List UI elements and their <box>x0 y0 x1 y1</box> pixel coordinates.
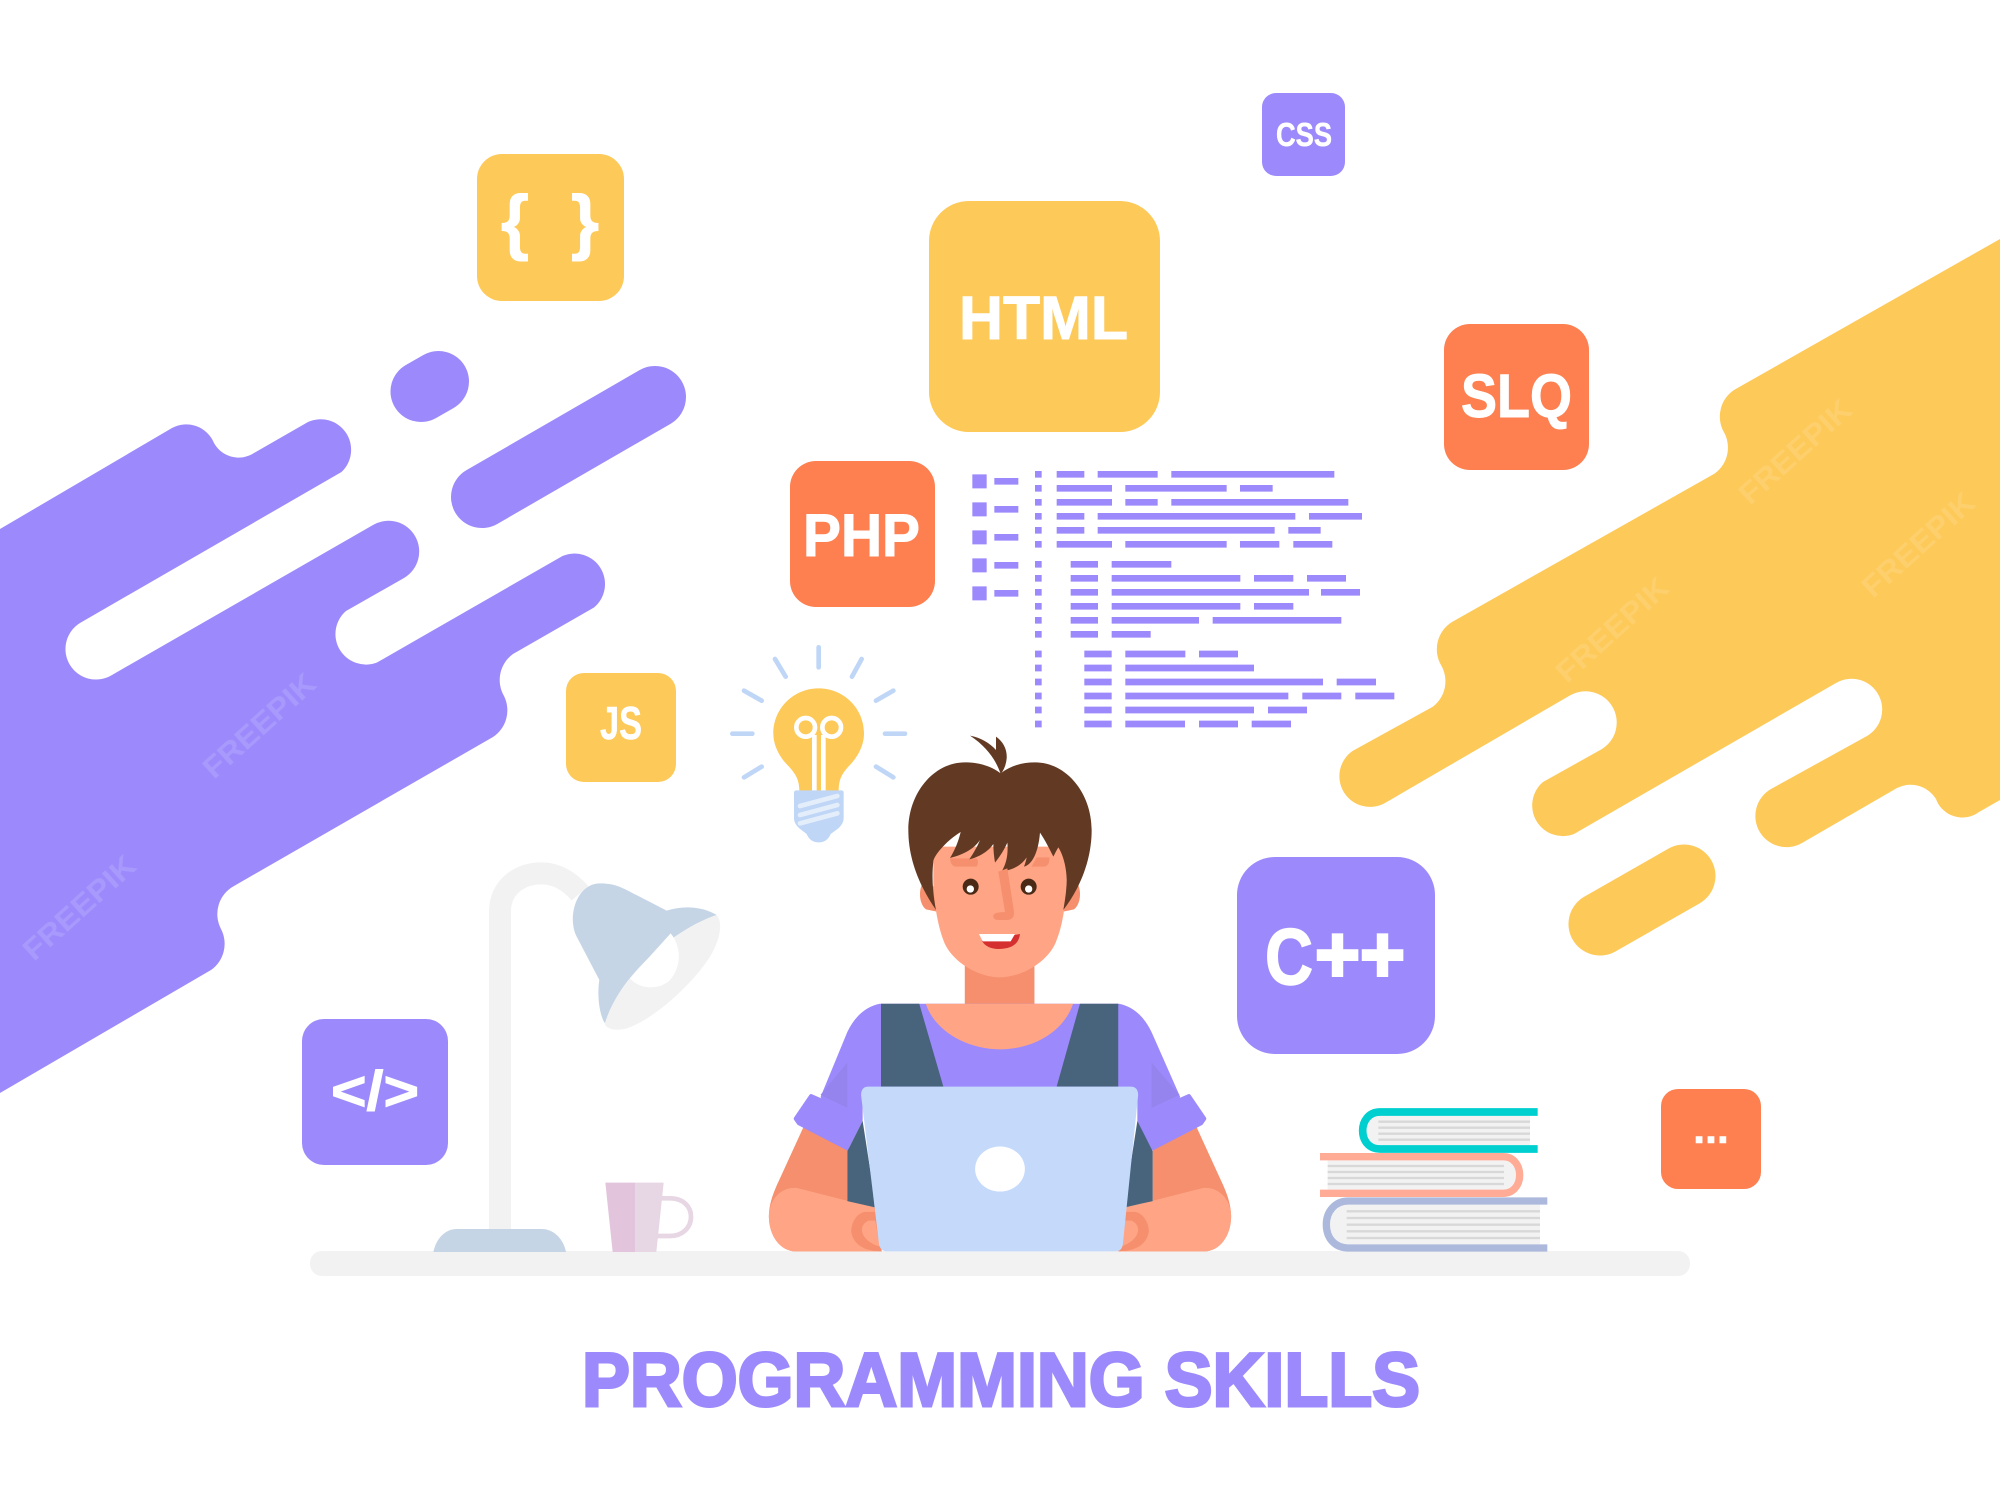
left arm <box>769 1127 882 1251</box>
lamp shade <box>573 883 717 1023</box>
yellow blob main shape <box>1339 239 2000 847</box>
bottom blue book <box>1326 1201 1547 1248</box>
tile: closing tag: </> <box>331 1059 419 1122</box>
hair <box>908 762 1092 910</box>
vest straps and sides <box>847 1004 1153 1208</box>
programmer head <box>908 736 1092 977</box>
bulb rays <box>732 647 905 777</box>
purple blob main shape <box>0 419 605 1093</box>
code listing <box>972 471 1394 727</box>
neck <box>965 958 1034 1004</box>
mug handle <box>657 1198 691 1236</box>
top teal book <box>1363 1112 1538 1149</box>
tile: C++ <box>1237 857 1435 1054</box>
tile: curly braces: { } <box>501 182 599 262</box>
stock watermarks: FREEPIK <box>1856 486 1982 604</box>
yellow paint blob, right <box>1339 239 2000 924</box>
purple long pill <box>482 397 655 497</box>
purple small pill <box>421 382 438 392</box>
stock watermarks <box>17 393 1982 967</box>
laptop <box>861 1087 1138 1251</box>
purple paint blob, left <box>0 382 655 1093</box>
desk <box>310 1251 1690 1276</box>
tile: SLQ <box>1444 324 1589 470</box>
desk lamp <box>433 873 720 1252</box>
line number dots <box>1035 471 1042 727</box>
stock watermarks: FREEPIK <box>1550 571 1676 689</box>
filament <box>796 718 841 791</box>
tile: HTML: HTML <box>959 284 1128 352</box>
purple t-shirt <box>821 1004 1180 1151</box>
nose <box>993 868 1014 920</box>
tile: curly braces <box>477 154 624 301</box>
ears <box>920 885 1080 912</box>
left eye <box>963 879 979 895</box>
tile: C++: C <box>1265 912 1313 1001</box>
lamp shade inside <box>605 915 720 1030</box>
tile: JS: JS <box>600 697 642 749</box>
stack of books <box>1320 1112 1547 1248</box>
mug body <box>605 1183 635 1252</box>
lamp pole <box>500 873 580 1233</box>
sleeve shading <box>821 1062 1179 1108</box>
left sleeve cuff <box>796 1096 847 1148</box>
tile: ellipsis <box>1661 1089 1761 1189</box>
right arm <box>1118 1127 1231 1251</box>
laptop logo <box>975 1146 1025 1192</box>
bulb glass <box>773 688 864 791</box>
tile: CSS <box>1262 93 1345 176</box>
tile: PHP <box>790 461 935 607</box>
programmer torso and arms <box>769 958 1231 1251</box>
middle salmon book <box>1320 1157 1520 1193</box>
tile: JS <box>566 673 676 782</box>
outline column squares and dashes <box>972 474 1018 600</box>
stock watermarks: FREEPIK <box>197 667 323 785</box>
bulb screw base <box>794 790 844 842</box>
right eye <box>1021 879 1037 895</box>
yellow pill <box>1600 876 1684 924</box>
tile: C++: ++ <box>1315 910 1405 999</box>
smile <box>979 934 1020 949</box>
right sleeve cuff <box>1153 1096 1204 1148</box>
title: PROGRAMMING SKILLS <box>582 1338 1420 1423</box>
base threads <box>800 796 837 823</box>
lamp base <box>433 1229 566 1252</box>
hair tuft <box>970 736 1007 774</box>
coffee mug <box>605 1183 691 1252</box>
tile: ellipsis: ... <box>1693 1104 1729 1153</box>
tile: HTML <box>929 201 1160 432</box>
code bars <box>1057 471 1394 727</box>
tile: SLQ: SLQ <box>1461 362 1572 430</box>
neckline <box>926 1004 1073 1049</box>
eyebrows <box>950 857 1049 867</box>
stock watermarks: FREEPIK <box>1733 393 1859 511</box>
tile: PHP: PHP <box>803 502 920 569</box>
lamp bulb <box>630 933 679 987</box>
stock watermarks: FREEPIK <box>17 849 143 967</box>
face <box>933 847 1067 977</box>
tile: closing tag <box>302 1019 448 1165</box>
icon: light bulb <box>732 647 905 842</box>
tile: CSS: CSS <box>1276 116 1332 153</box>
